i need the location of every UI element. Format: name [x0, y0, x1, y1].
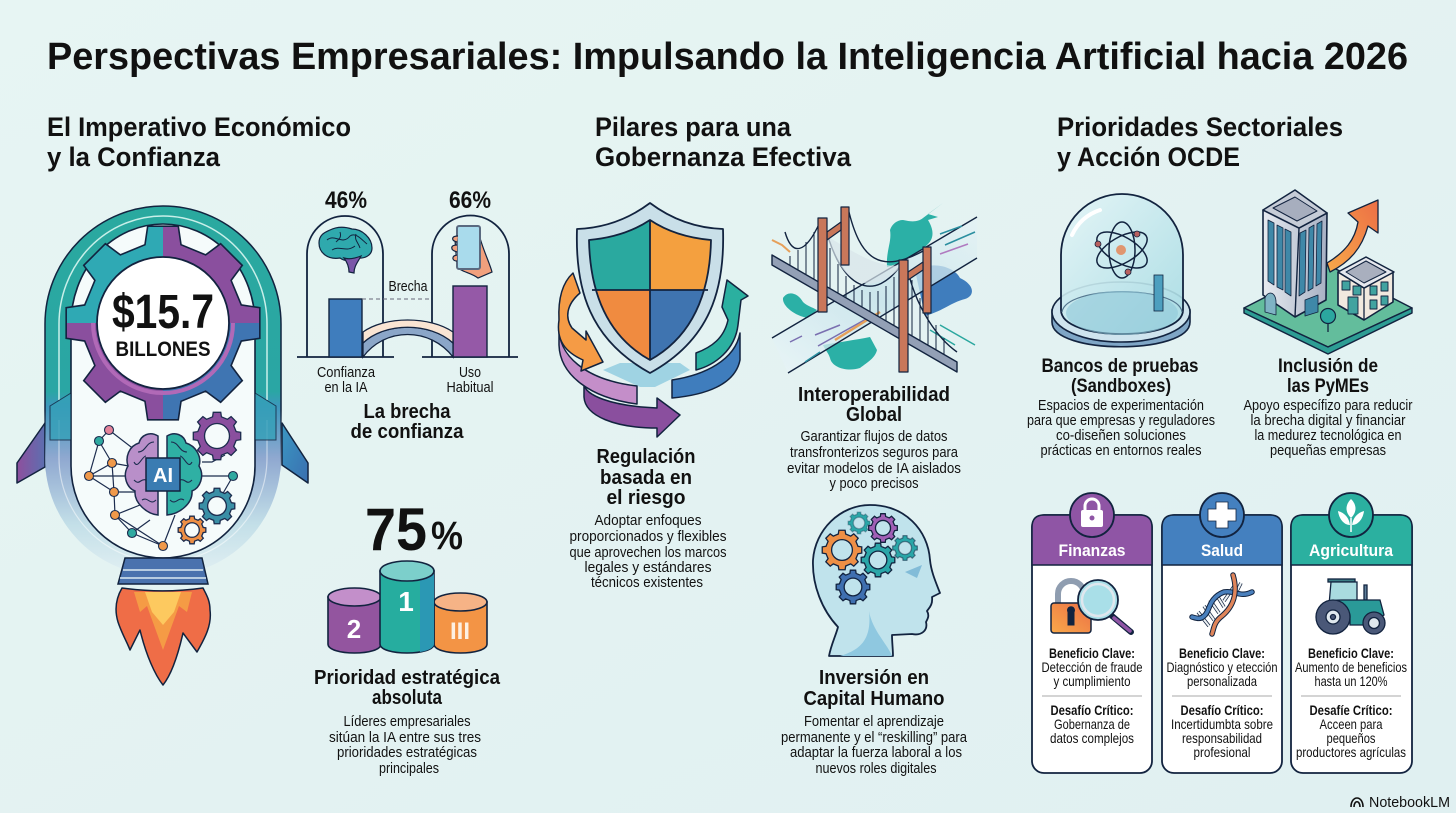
text: health details: personalizada	[1187, 673, 1257, 689]
bar labels: Habitual	[446, 379, 494, 396]
text: risk-based regulation: proporcionados y flexibles	[570, 528, 726, 545]
card: finance	[1032, 493, 1152, 773]
text: finance details: Beneficio Clave:	[1049, 645, 1135, 661]
icon: priority podium: 2	[347, 614, 361, 644]
trust gap heading	[350, 401, 464, 443]
bar labels	[317, 364, 494, 396]
heading: governance	[595, 112, 852, 172]
chart: trust gap bars	[297, 187, 518, 443]
bar labels: Uso	[459, 364, 481, 381]
arch frames	[297, 216, 518, 357]
text: agriculture details: Aumento de beneficios	[1295, 659, 1407, 675]
text: human capital: nuevos roles digitales	[816, 760, 936, 777]
text: health details: Diagnóstico y etección	[1166, 659, 1278, 675]
cables	[785, 208, 957, 352]
text: global interoperability: Interoperabilidad	[798, 384, 950, 406]
text: agriculture details	[1295, 645, 1407, 760]
text: health details: Desafío Crítico:	[1180, 702, 1264, 718]
text: agriculture details: Acceen para	[1320, 716, 1383, 732]
rocket body arch	[45, 206, 281, 576]
brain hemispheres	[125, 434, 202, 515]
card: finance: Finanzas	[1058, 541, 1126, 560]
icon: bridge over data roads	[772, 203, 977, 373]
text: health details: Beneficio Clave:	[1179, 645, 1265, 661]
bridge deck	[772, 255, 957, 372]
text: global interoperability: transfronterizos seguros para	[790, 444, 959, 461]
text: agriculture details: Desafíe Crítico:	[1310, 702, 1392, 718]
neural network lines	[89, 430, 233, 546]
text: SME inclusion: la brecha digital y financiar	[1250, 412, 1406, 429]
gap label	[362, 278, 432, 299]
text: risk-based regulation: el riesgo	[606, 487, 686, 509]
hangers	[790, 232, 944, 354]
icon: lock badge	[1070, 493, 1114, 537]
front towers	[818, 218, 923, 372]
stat: 75 percent	[365, 496, 463, 563]
text: risk-based regulation: basada en	[600, 467, 692, 489]
text: health details	[1166, 645, 1278, 760]
text: SME inclusion: Inclusión de	[1278, 356, 1378, 377]
heading: sector priorities	[1057, 112, 1343, 172]
text: strategic priority: Líderes empresariales	[344, 713, 470, 730]
text: sandboxes	[1027, 356, 1215, 459]
icon: leaf badge	[1329, 493, 1373, 537]
text: strategic priority: sitúan la IA entre sus tres	[329, 729, 481, 746]
panel: governance pillars	[558, 112, 977, 777]
text: global interoperability: y poco precisos	[830, 475, 918, 492]
text: strategic priority	[314, 667, 501, 777]
AI chip	[146, 458, 180, 491]
text: global interoperability: Global	[846, 404, 902, 426]
text: strategic priority: prioridades estratégicas	[337, 744, 477, 761]
bar labels: en la IA	[324, 379, 368, 396]
gap label: Brecha	[388, 278, 428, 295]
percentages	[325, 187, 491, 214]
text: agriculture details: pequeños	[1326, 730, 1376, 746]
text: global interoperability	[787, 384, 961, 492]
text: global interoperability: Garantizar flujos de datos	[800, 428, 948, 445]
text: risk-based regulation	[570, 446, 726, 591]
text: health details: Incertidumbta sobre	[1171, 716, 1273, 732]
icon: head with gears	[813, 505, 940, 656]
text: SME inclusion: las PyMEs	[1287, 376, 1369, 397]
panel: economic imperative and trust	[17, 112, 518, 777]
stat: 15.7 billones: BILLONES	[116, 338, 210, 361]
trust gap heading: La brecha	[364, 401, 451, 423]
text: sandboxes: para que empresas y reguladores	[1027, 412, 1215, 429]
icon: priority podium	[328, 561, 487, 653]
text: risk-based regulation: técnicos existentes	[591, 574, 703, 591]
icon: brain	[319, 227, 372, 273]
rocket flame	[116, 588, 210, 685]
text: SME inclusion: Apoyo específizo para reducir	[1244, 397, 1412, 414]
text: strategic priority: principales	[379, 760, 439, 777]
text: finance details	[1042, 645, 1143, 746]
icon: phone in hand	[452, 226, 492, 278]
back towers	[841, 207, 931, 313]
text: human capital: Capital Humano	[804, 688, 944, 710]
text: risk-based regulation: Adoptar enfoques	[594, 512, 702, 529]
icon: shield with cycle arrows	[558, 203, 748, 437]
text: sandboxes: Bancos de pruebas	[1042, 356, 1198, 377]
text: finance details: Gobernanza de	[1054, 716, 1130, 732]
icon: priority podium: III	[450, 618, 470, 645]
rocket nozzle	[118, 558, 208, 584]
data lines	[772, 226, 975, 362]
text: SME inclusion	[1244, 356, 1412, 459]
text: human capital: Inversión en	[819, 667, 929, 689]
panel: sector priorities	[1027, 112, 1412, 773]
text: finance details: Detección de fraude	[1042, 659, 1143, 675]
card: agriculture: Agricultura	[1309, 541, 1393, 560]
AI chip: AI	[153, 465, 173, 487]
card: agriculture	[1291, 493, 1412, 773]
text: sandboxes: Espacios de experimentación	[1038, 397, 1204, 414]
big gear	[66, 226, 260, 420]
heading: economic imperative: El Imperativo Económico	[47, 112, 351, 142]
rocket fins	[17, 423, 308, 483]
icon: DNA helix	[1192, 575, 1252, 634]
text: global interoperability: evitar modelos de IA aislados	[787, 460, 961, 477]
icon: medical cross badge	[1200, 493, 1244, 537]
card: health: Salud	[1201, 541, 1243, 560]
icon: lock and magnifier	[1051, 580, 1131, 633]
shoulder accents	[50, 393, 276, 440]
heading: economic imperative	[47, 112, 351, 172]
text: human capital: adaptar la fuerza laboral a los	[790, 744, 962, 761]
text: finance details: Desafío Crítico:	[1050, 702, 1134, 718]
card: health	[1162, 493, 1282, 773]
text: SME inclusion: la medurez tecnológica en	[1254, 427, 1402, 444]
text: sandboxes: co-diseñen soluciones	[1056, 427, 1186, 444]
text: agriculture details: productores agrículas	[1296, 744, 1406, 760]
title: Perspectivas Empresariales: Impulsando la Inteligencia Artificial hacia 2026	[47, 36, 1408, 78]
text: risk-based regulation: Regulación	[596, 446, 696, 468]
bars	[329, 286, 487, 357]
heading: sector priorities: Prioridades Sectoriales	[1057, 112, 1343, 142]
text: finance details: datos complejos	[1050, 730, 1134, 746]
stat: 75 percent: %	[431, 514, 463, 558]
stat: 15.7 billones	[112, 286, 214, 361]
text: health details: responsabilidad	[1182, 730, 1262, 746]
text: finance details: y cumplimiento	[1054, 673, 1131, 689]
text: risk-based regulation: que aprovechen los marcos	[570, 544, 726, 561]
percentages: 46%	[325, 187, 367, 214]
icon: tractor	[1316, 579, 1385, 634]
text: health details: profesional	[1194, 744, 1250, 760]
icon: buildings with growth arrow	[1244, 190, 1412, 354]
land masses	[783, 203, 972, 370]
icon: rocket with gear and AI brain	[17, 206, 308, 685]
icon: glass dome sandbox	[1052, 194, 1190, 347]
text: strategic priority: absoluta	[372, 687, 443, 709]
text: sandboxes: (Sandboxes)	[1071, 376, 1171, 397]
rocket white capsule	[71, 224, 255, 558]
heading: governance: Gobernanza Efectiva	[595, 142, 852, 172]
heading: sector priorities: y Acción OCDE	[1057, 142, 1240, 172]
text: agriculture details: hasta un 120%	[1314, 673, 1388, 689]
text: human capital: Fomentar el aprendizaje	[804, 713, 944, 730]
network nodes	[84, 426, 238, 550]
text: agriculture details: Beneficio Clave:	[1308, 645, 1394, 661]
bridge between bars	[363, 320, 453, 357]
bar labels: Confianza	[317, 364, 376, 381]
percentages: 66%	[449, 187, 491, 214]
heading: governance: Pilares para una	[595, 112, 792, 142]
trust gap heading: de confianza	[350, 421, 464, 443]
heading: economic imperative: y la Confianza	[47, 142, 221, 172]
text: risk-based regulation: legales y estándares	[584, 559, 712, 576]
NotebookLM logo: NotebookLM	[1369, 794, 1450, 811]
icon: priority podium: 1	[398, 586, 414, 617]
text: human capital	[781, 667, 968, 777]
data road	[772, 217, 977, 373]
text: human capital: permanente y el “reskilling” para	[781, 729, 968, 746]
small gears	[178, 412, 241, 544]
text: sandboxes: prácticas en entornos reales	[1040, 442, 1202, 459]
text: SME inclusion: pequeñas empresas	[1270, 442, 1386, 459]
stat: 75 percent: 75	[365, 496, 427, 563]
stat: 15.7 billones: $15.7	[112, 286, 214, 339]
text: strategic priority: Prioridad estratégica	[314, 667, 501, 689]
